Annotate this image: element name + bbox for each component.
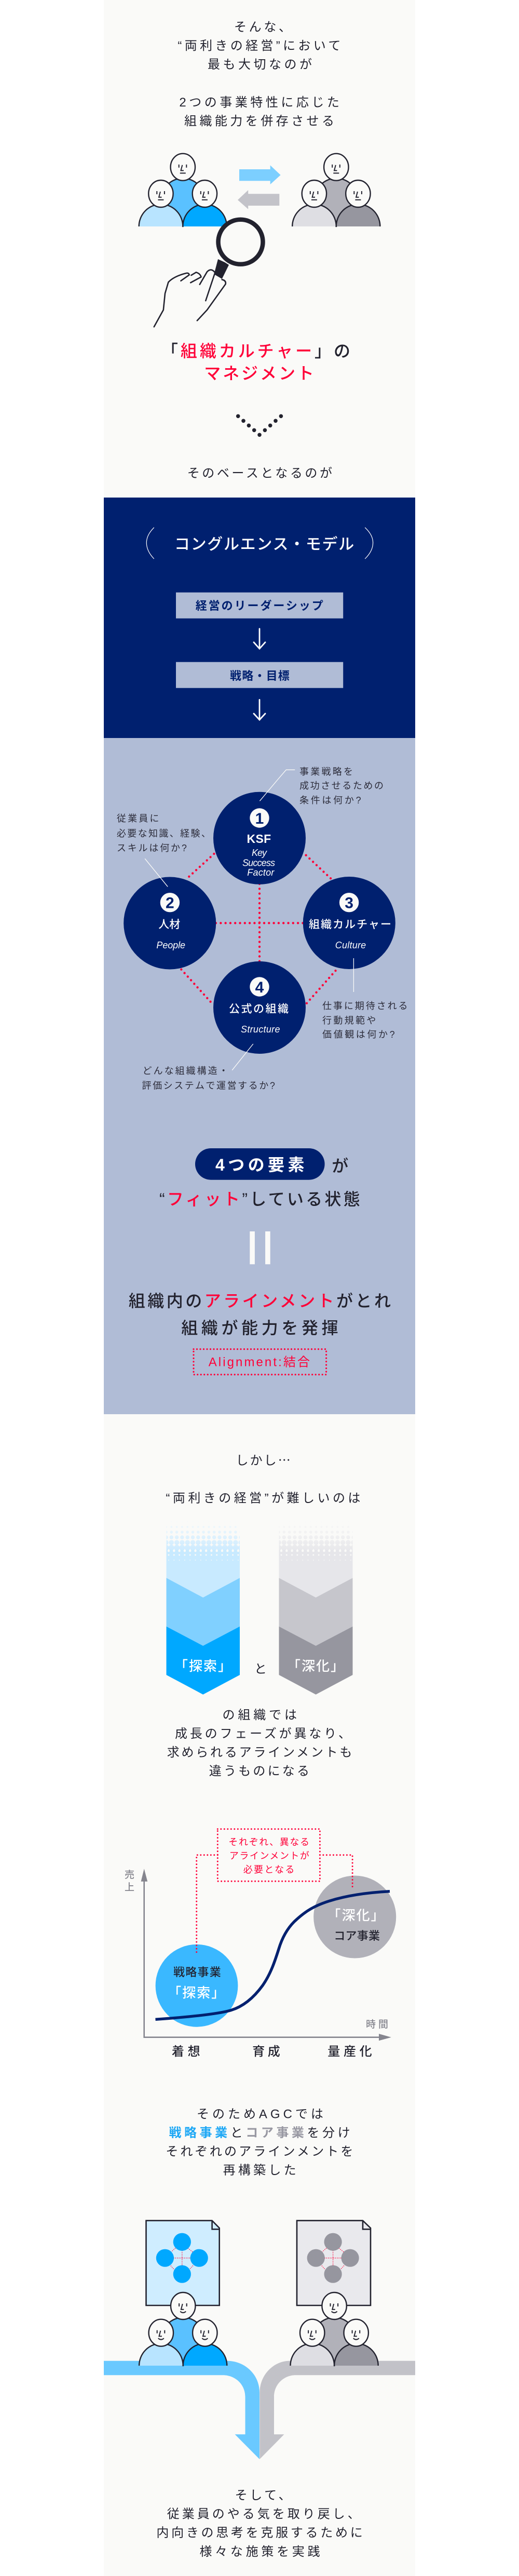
callout: structure question: [142, 1066, 275, 1091]
text: different alignment: 求められるアラインメントも: [167, 1746, 352, 1760]
callout: different alignment needed: 必要となる: [243, 1864, 294, 1875]
pill: four elements: 4つの要素: [215, 1156, 304, 1174]
text: fit state: “フィット”している状態: [159, 1190, 360, 1209]
axis label: sales: 売: [125, 1869, 134, 1881]
text: alignment result: 組織が能力を発揮: [181, 1319, 338, 1337]
text: AGC approach: 再構築した: [223, 2164, 296, 2177]
circle 1: KSF: [213, 792, 306, 884]
text: alignment result: [129, 1292, 391, 1337]
title: congruence model: [146, 528, 373, 559]
text: different alignment: [167, 1708, 352, 1778]
arrow: down 1: [254, 629, 265, 649]
people illustration: smiling grey team: [291, 2292, 378, 2366]
circle 2: people: 人材: [158, 919, 180, 931]
box: leadership: [176, 593, 343, 619]
closing text: 内向きの思考を克服するために: [156, 2526, 363, 2540]
box: strategy and goals: 戦略・目標: [230, 669, 290, 682]
text: that foundation: そのベースとなるのが: [187, 466, 332, 480]
page strip background: [104, 0, 415, 2576]
people illustration: smiling blue team: [139, 2292, 227, 2366]
text: different alignment: 違うものになる: [209, 1764, 309, 1778]
text: alignment result: 組織内のアラインメントがとれ: [129, 1292, 391, 1310]
intro text: そんな、: [234, 20, 291, 34]
stage labels: 育成: [252, 2045, 280, 2059]
halftone fade: [166, 1526, 240, 1550]
circle 1: KSF: 1: [255, 810, 264, 827]
bubble: deepen: [313, 1876, 396, 1958]
circle 1: KSF: Success: [242, 858, 275, 868]
stage labels: [172, 2045, 372, 2059]
circle 1: KSF: KSF: [247, 832, 271, 846]
arrow: blue band merging down: [104, 2361, 260, 2459]
closing text: そして、: [235, 2489, 291, 2503]
callout: culture question: 行動規範や: [322, 1015, 376, 1026]
callout: people question: 必要な知識、経験、: [117, 828, 211, 839]
bubble: explore: [156, 1944, 238, 2027]
intro text: 組織能力を併存させる: [184, 114, 334, 128]
callout: people question: スキルは何か?: [117, 843, 187, 853]
circle 2: people: People: [156, 940, 185, 950]
arrow: down 2: [254, 700, 265, 720]
intro text: “両利きの経営”において: [177, 39, 340, 53]
diagram: dotted connectors: [181, 854, 338, 1003]
callout: KSF question: 事業戦略を: [299, 767, 353, 777]
text: different alignment: 成長のフェーズが異なり、: [175, 1727, 351, 1741]
text: ga: が: [332, 1157, 348, 1175]
leader lines: [145, 770, 353, 1070]
circle 4: structure: [213, 961, 306, 1054]
people illustration: blue team: [139, 154, 227, 226]
callout: KSF question: 条件は何か?: [299, 795, 361, 806]
circle 2: people: 2: [166, 895, 174, 912]
bubble text: explore: 戦略事業: [173, 1966, 221, 1979]
stage labels: 量産化: [327, 2045, 372, 2059]
bubble text: deepen: 「深化」: [327, 1908, 384, 1923]
callout: culture question: 仕事に期待される: [322, 1001, 408, 1011]
closing text: 様々な施策を実践: [199, 2545, 320, 2559]
text: different alignment: の組織では: [222, 1708, 297, 1722]
callout: culture question: [322, 1001, 408, 1040]
heading: organizational culture management: [161, 342, 350, 383]
bubble text: deepen: コア事業: [334, 1929, 380, 1942]
intro text: 2つの事業特性に応じた: [179, 96, 339, 110]
text: however: しかし…: [236, 1450, 291, 1468]
closing text: [156, 2489, 363, 2559]
axis arrowheads: [141, 1869, 391, 2041]
people illustration: grey team: [292, 154, 380, 226]
axis label: sales: [125, 1869, 134, 1893]
circle 3: culture: 3: [345, 895, 353, 912]
circle 2: people: [124, 877, 216, 969]
axis label: time: 時間: [366, 2019, 388, 2030]
document: core business: [297, 2221, 371, 2305]
callout: different alignment needed: それぞれ、異なる: [228, 1837, 309, 1847]
chevron column: explore: 「探索」: [174, 1658, 231, 1674]
circle 3: culture: [303, 877, 395, 969]
arrow: grey left: [238, 190, 279, 209]
circle 1: KSF: Key: [252, 848, 267, 858]
chevron column: explore: [166, 1522, 244, 1695]
icon: equals bars: [250, 1231, 270, 1264]
bubble text: explore: [168, 1966, 225, 2001]
icon: dotted chevron: [236, 414, 283, 437]
intro text: [177, 20, 340, 128]
axes: [144, 1880, 380, 2037]
circle 1: KSF: Factor: [247, 867, 275, 878]
callout: KSF question: [299, 767, 384, 806]
text: and: と: [254, 1662, 267, 1676]
callout: different alignment needed: [197, 1829, 352, 1954]
chevron column: deepen: 「深化」: [287, 1658, 344, 1674]
S curve: [156, 1891, 390, 2019]
chevron column: deepen: [279, 1533, 353, 1695]
panel: congruence model navy: [104, 498, 415, 738]
callout: structure question: どんな組織構造・: [143, 1066, 228, 1076]
intro text: 最も大切なのが: [208, 58, 312, 72]
callout: people question: 従業員に: [117, 813, 159, 824]
callout: alignment definition: [194, 1349, 326, 1375]
chart: growth S-curve: [125, 1829, 396, 2059]
text: AGC approach: それぞれのアラインメントを: [166, 2145, 353, 2158]
callout: structure question: 評価システムで運営するか?: [142, 1080, 275, 1091]
bubble text: explore: 「探索」: [168, 1985, 225, 2001]
callout: alignment definition: Alignment:結合: [209, 1356, 310, 1369]
callout: people question: [117, 813, 211, 853]
closing text: 従業員のやる気を取り戻し、: [167, 2507, 360, 2521]
text: AGC approach: [166, 2107, 353, 2177]
arrow: blue right: [239, 165, 281, 184]
circle 4: structure: 公式の組織: [229, 1003, 289, 1015]
circle 4: structure: 4: [255, 979, 264, 996]
circle 3: culture: Culture: [335, 940, 366, 950]
title: congruence model: コングルエンス・モデル: [174, 536, 354, 553]
callout: different alignment needed: アラインメントが: [229, 1851, 309, 1861]
box: leadership: 経営のリーダーシップ: [196, 599, 323, 612]
bubble text: deepen: [327, 1908, 384, 1942]
document: strategy business: [146, 2221, 220, 2305]
callout: culture question: 価値観は何か?: [322, 1029, 395, 1040]
text: why it is difficult: “両利きの経営”が難しいのは: [166, 1492, 360, 1506]
axis label: sales: 上: [125, 1882, 134, 1893]
panel: four elements light blue: [104, 738, 415, 1414]
text: AGC approach: 戦略事業とコア事業を分け: [169, 2126, 350, 2140]
circle 4: structure: Structure: [241, 1024, 280, 1035]
heading: organizational culture management: 「組織カルチャー」の: [161, 342, 350, 360]
arrow: grey band merging down: [260, 2361, 415, 2459]
box: strategy and goals: [176, 662, 343, 688]
heading: organizational culture management: マネジメント: [204, 364, 314, 383]
halftone fade grey: [279, 1533, 353, 1550]
stage labels: 着想: [172, 2045, 200, 2059]
callout: KSF question: 成功させるための: [299, 781, 384, 791]
pill: four elements: [195, 1148, 325, 1180]
text: AGC approach: そのためAGCでは: [197, 2107, 323, 2121]
circle 3: culture: 組織カルチャー: [309, 919, 391, 931]
icon: hand holding magnifier: [154, 220, 263, 327]
